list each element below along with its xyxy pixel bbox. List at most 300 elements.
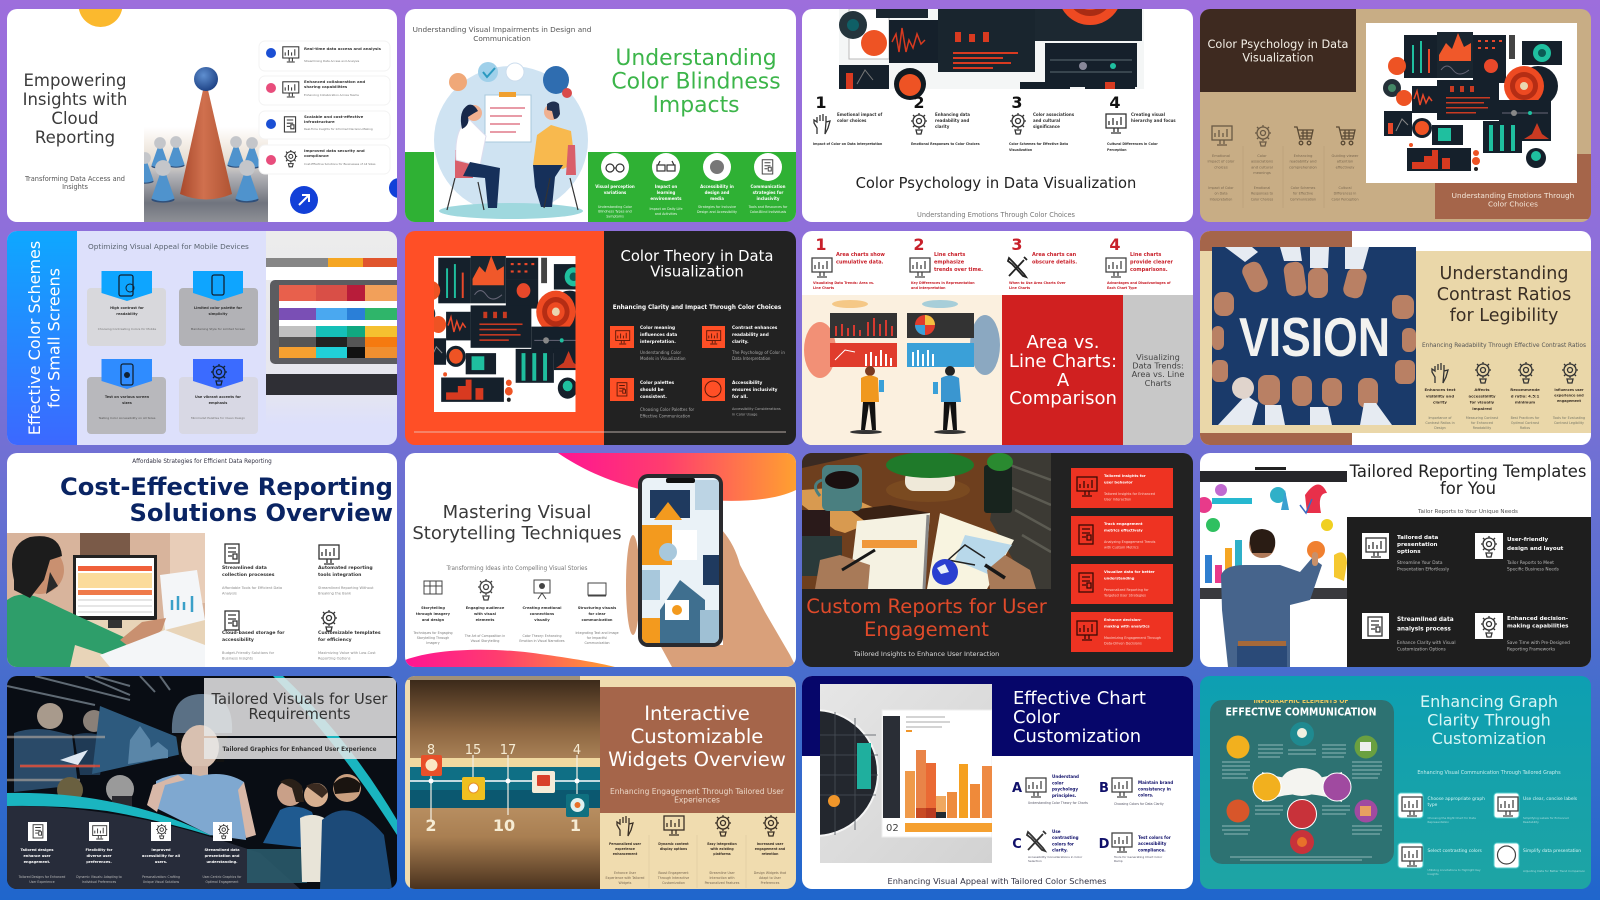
box 1: Tailored Insights for Enhanced bbox=[1103, 492, 1155, 496]
column 3: for Effective bbox=[1293, 192, 1313, 196]
item 2 bbox=[911, 93, 980, 146]
panel: Tailored Reporting Templates bbox=[1196, 453, 1591, 667]
column 1: Contrast Ratios in bbox=[1425, 421, 1455, 425]
subtitle: Tailored Insights to Enhance User Interaction bbox=[853, 650, 999, 658]
item: templates: Customizable templates bbox=[318, 630, 381, 636]
item: decision-making: Save Time with Pre-Designed bbox=[1507, 640, 1570, 646]
title: Cost-Effective Reporting bbox=[60, 473, 393, 501]
item: automated bbox=[318, 545, 374, 596]
subtitle: Enhancing Visual Communication Through Tailored Graphs bbox=[1417, 770, 1561, 776]
column 1: on Data bbox=[1214, 192, 1228, 196]
subtitle: Understanding Emotions Through Color Choices bbox=[917, 211, 1076, 219]
item 2: emphasize bbox=[934, 259, 965, 265]
item 4: User-Centric Graphics for bbox=[203, 875, 242, 879]
item 3: 3 bbox=[1011, 93, 1023, 112]
title: Color bbox=[1013, 707, 1060, 728]
teal swoosh left bbox=[7, 793, 212, 836]
title block: A bbox=[1057, 370, 1070, 391]
box 2: Analyzing Engagement Trends bbox=[1104, 540, 1156, 544]
item 2: 2 bbox=[913, 235, 925, 254]
item 2: Flexibility for bbox=[85, 848, 113, 852]
item 4 bbox=[1106, 235, 1173, 290]
title block: Visualization bbox=[1242, 51, 1314, 64]
list card 3: Real-Time Insights for Informed Decision-Making bbox=[304, 127, 373, 131]
title panel: Tailored Visuals for User bbox=[211, 691, 388, 708]
title: Color Theory in Data bbox=[621, 248, 773, 265]
item D bbox=[1099, 833, 1171, 863]
item D: Test colors for bbox=[1138, 835, 1171, 840]
item: graph type: Representation bbox=[1428, 820, 1449, 824]
item: automated: Automated reporting bbox=[318, 565, 373, 571]
icon: yellow semicircle bbox=[78, 9, 122, 27]
item C: C bbox=[1012, 837, 1022, 852]
card: high contrast: High contrast for bbox=[110, 306, 144, 310]
title block bbox=[1002, 295, 1123, 445]
timeline photo bbox=[410, 680, 600, 889]
column 3: Ratios bbox=[1520, 426, 1530, 430]
item: communication: strategies for bbox=[753, 190, 783, 195]
item B: consistency in bbox=[1138, 786, 1171, 791]
item: graph type: Choose appropriate graph bbox=[1428, 796, 1485, 802]
card: test screen sizes bbox=[87, 359, 166, 434]
column 2: associations bbox=[1251, 160, 1273, 164]
item 1: Area charts show bbox=[836, 252, 885, 258]
dark lower area bbox=[7, 806, 300, 889]
item: graph type: Choosing the Right Chart for Data bbox=[1428, 816, 1476, 820]
title: Understanding bbox=[615, 46, 777, 71]
subtitle: Understanding Visual Impairments in Design and bbox=[413, 25, 591, 34]
item A bbox=[1012, 774, 1088, 805]
panel: Custom Reports for User Engagement bbox=[802, 452, 1193, 667]
item: simplify: Simplify data presentation bbox=[1523, 848, 1581, 854]
item 3: Color Schemes for Effective Data bbox=[1009, 142, 1068, 146]
item: templates: for efficiency bbox=[318, 637, 352, 643]
item: visual perception: variations bbox=[604, 190, 627, 195]
column 1: experience bbox=[615, 847, 635, 851]
item 4: hierarchy and focus bbox=[1131, 118, 1176, 123]
title block bbox=[600, 687, 795, 813]
photo: color palette screen bbox=[266, 231, 402, 425]
item 3: Unique Visual Solutions bbox=[143, 880, 180, 884]
icon: arrow button bbox=[290, 186, 318, 214]
item: palettes: Effective Communication bbox=[640, 414, 691, 418]
item 1: Tailored designs bbox=[20, 848, 54, 852]
item 3 bbox=[1009, 93, 1075, 152]
item: color meaning bbox=[610, 325, 686, 361]
item: learning environments: learning bbox=[657, 190, 675, 195]
item D: compliance. bbox=[1138, 847, 1166, 852]
list card 2: Enhancing Collaboration Across Teams bbox=[304, 93, 359, 97]
column 2: Responses to bbox=[1251, 192, 1273, 196]
column 1: Interpretation bbox=[1210, 197, 1232, 201]
item: contrasting colors: Insights bbox=[1428, 872, 1439, 876]
title: Enhancing Graph bbox=[1420, 692, 1558, 711]
item 3: Improved bbox=[151, 848, 171, 852]
column 3: Recommende bbox=[1510, 387, 1540, 392]
item: communication bbox=[748, 153, 788, 214]
item: learning environments: and Activities bbox=[655, 212, 677, 216]
dashboard image bbox=[1366, 23, 1577, 183]
column 2: Through Interactive bbox=[657, 876, 689, 880]
list card 3: infrastructure bbox=[304, 119, 335, 124]
column 4: Contrast Legibility bbox=[1554, 421, 1584, 425]
item C: Accessibility Considerations in Color bbox=[1028, 855, 1083, 859]
item: simplify bbox=[1494, 843, 1585, 873]
item: visual perception: Understanding Color bbox=[598, 205, 633, 209]
item 4: Cultural Differences in Color bbox=[1107, 142, 1158, 146]
subtitle block bbox=[1435, 154, 1591, 219]
card: vibrant accents: Use vibrant accents for bbox=[195, 395, 241, 399]
subtitle: Affordable Strategies for Efficient Data Reporting bbox=[132, 459, 272, 465]
box 1 bbox=[1071, 468, 1173, 508]
infographic: effective communication: INFOGRAPHIC ELEMENTS OF bbox=[1254, 697, 1349, 705]
item: automated: Streamlined Reporting Without bbox=[318, 586, 374, 590]
item 2: Dynamic Visuals: Adapting to bbox=[76, 875, 122, 879]
item: automated: tools integration bbox=[318, 572, 361, 578]
box 1: User Interaction bbox=[1104, 498, 1131, 502]
item B: Maintain brand bbox=[1138, 780, 1173, 785]
list card 2 bbox=[259, 76, 390, 105]
item: palettes: Color palettes bbox=[640, 380, 675, 386]
list card 1 bbox=[259, 41, 390, 71]
item: automated: Breaking the Bank bbox=[318, 592, 352, 596]
item: emotional: Creating emotional bbox=[523, 606, 561, 610]
column 1 bbox=[606, 816, 644, 885]
item: engaging: Visual Storytelling bbox=[471, 639, 499, 643]
item: presentation bbox=[1362, 533, 1450, 573]
timeline photo: 8 bbox=[427, 743, 435, 758]
gradient swoosh top bbox=[558, 453, 796, 501]
title: Effective Chart bbox=[1013, 688, 1146, 709]
column 3: Communication bbox=[1290, 197, 1316, 201]
column 4: Influences user bbox=[1554, 388, 1584, 392]
item: emotional bbox=[519, 580, 565, 643]
item: graph type: type bbox=[1428, 802, 1438, 808]
item 3: 3 bbox=[1011, 235, 1023, 254]
column 2 bbox=[1466, 362, 1499, 430]
green band bbox=[405, 152, 796, 222]
box 4: making with analytics bbox=[1104, 624, 1150, 628]
panel: Enhancing Graph Clarity bbox=[1200, 676, 1591, 889]
item: accessibility: Accessibility bbox=[732, 380, 762, 386]
title panel bbox=[204, 678, 396, 736]
dashboard image bbox=[418, 255, 593, 412]
column 2: display options bbox=[660, 847, 687, 851]
subtitle block: Area vs. Line bbox=[1132, 369, 1184, 379]
column 3: Optimal Contrast bbox=[1511, 421, 1540, 425]
title block: Interactive bbox=[644, 702, 750, 725]
title block: Comparison bbox=[1009, 388, 1117, 409]
card: vibrant accents bbox=[179, 359, 258, 434]
photo: team and holographic panel bbox=[7, 676, 256, 840]
item 4 bbox=[1106, 93, 1176, 152]
column 4: engagement bbox=[1557, 399, 1581, 403]
item: user-friendly bbox=[1475, 533, 1564, 573]
box 2: Track engagement bbox=[1104, 522, 1143, 526]
item 3: and cultural bbox=[1033, 118, 1061, 123]
column 4 bbox=[754, 815, 787, 885]
title: Mastering Visual bbox=[443, 502, 591, 523]
item: cloud: Cloud-based storage for bbox=[222, 630, 285, 636]
item: palettes: consistent. bbox=[640, 394, 667, 400]
item: communication: Tools and Resources for bbox=[748, 205, 788, 209]
item B bbox=[1099, 778, 1173, 806]
column 1: Enhances text bbox=[1424, 387, 1456, 392]
column 4: Guiding viewer bbox=[1331, 154, 1359, 158]
item: cloud: Budget-Friendly Solutions for bbox=[222, 651, 275, 655]
column 4: Cultural bbox=[1339, 186, 1352, 190]
item 1 bbox=[813, 93, 883, 146]
item: structuring: for clear bbox=[588, 612, 606, 616]
item 3: Line Charts bbox=[1009, 286, 1030, 290]
column 3 bbox=[1289, 127, 1317, 201]
item: analysis bbox=[1362, 613, 1456, 653]
column 4: attention bbox=[1337, 160, 1353, 164]
subtitle: Transforming Data Access and bbox=[24, 175, 125, 183]
item D: accessibility bbox=[1138, 841, 1167, 846]
title: Impacts bbox=[652, 93, 740, 118]
item: learning environments: Impact on Daily Life bbox=[650, 207, 682, 211]
item: analysis: analysis process bbox=[1397, 626, 1451, 632]
item A: psychology bbox=[1052, 787, 1078, 792]
card: high contrast bbox=[87, 271, 166, 346]
column 2: Affects bbox=[1474, 387, 1490, 392]
column 3: Personalized Features bbox=[705, 881, 740, 885]
item: cloud: accessibility bbox=[222, 637, 254, 643]
item: contrasting colors: Select contrasting colors bbox=[1428, 848, 1483, 854]
card: high contrast: Choosing Contrasting Colors for Mobile bbox=[98, 327, 156, 331]
item: visual perception: Symptoms bbox=[606, 214, 624, 218]
column 1 bbox=[1208, 126, 1235, 201]
item 3: Personalization: Crafting bbox=[142, 875, 180, 879]
box 2: metrics effectively bbox=[1104, 528, 1143, 532]
item: visual perception: Visual perception bbox=[595, 184, 635, 189]
item D: Tools for Generating Chart Color bbox=[1113, 855, 1163, 859]
item: accessibility: for all. bbox=[732, 394, 748, 400]
title: Clarity Through bbox=[1427, 710, 1551, 730]
column 2: Readability bbox=[1473, 426, 1491, 430]
item 4: Advantages and Disadvantages of bbox=[1107, 281, 1171, 285]
card: limited palette bbox=[179, 271, 258, 346]
card: test screen sizes: Test on various screen bbox=[105, 395, 150, 399]
column 3: readability and bbox=[1289, 160, 1317, 164]
subtitle: Communication bbox=[473, 34, 531, 43]
item: contrast bbox=[702, 325, 785, 361]
item: graph type bbox=[1398, 793, 1485, 824]
item: user-friendly: design and layout bbox=[1507, 546, 1564, 552]
card: limited palette: simplicity bbox=[208, 312, 228, 316]
item A: principles. bbox=[1052, 793, 1077, 798]
item: learning environments: environments bbox=[650, 196, 682, 201]
item 1: Impact of Color on Data Interpretation bbox=[813, 142, 883, 146]
illustration: two people at clipboard bbox=[434, 62, 588, 219]
item: structuring: Communication bbox=[584, 641, 610, 645]
item 1: enhance user bbox=[23, 854, 51, 858]
item: presentation: Streamline Your Data bbox=[1397, 560, 1443, 566]
timeline photo: 1 bbox=[570, 816, 581, 835]
panel: Effective Color Schemes for Small Screens bbox=[7, 231, 402, 445]
panel: Understanding Color Blindness Impacts bbox=[405, 9, 796, 222]
item: labels bbox=[1494, 793, 1578, 824]
dashboard image bbox=[839, 0, 1144, 100]
item: emotional: connections bbox=[530, 612, 554, 616]
list card 4: compliance bbox=[304, 153, 329, 158]
title: Engagement bbox=[864, 618, 989, 641]
subtitle panel bbox=[204, 738, 396, 759]
item 4: presentation and bbox=[205, 854, 240, 858]
item: analysis: Customization Options bbox=[1397, 647, 1446, 653]
illustration: analysts and charts bbox=[802, 295, 1002, 445]
item A: A bbox=[1012, 781, 1022, 796]
teal swoosh right bbox=[273, 676, 397, 835]
item 1: color choices bbox=[837, 118, 867, 123]
item: emotional: visually bbox=[534, 618, 550, 622]
item B: B bbox=[1099, 781, 1109, 796]
column 4: Differences in bbox=[1334, 192, 1356, 196]
column 4 bbox=[1552, 362, 1585, 425]
item 2: and Interpretation bbox=[911, 286, 946, 290]
item: engaging: Engaging audience bbox=[466, 606, 505, 610]
item 2: 2 bbox=[913, 93, 925, 112]
list card 3 bbox=[259, 111, 390, 139]
item A: Understand bbox=[1052, 774, 1079, 779]
title block: Widgets Overview bbox=[608, 748, 786, 771]
item 2: Line charts bbox=[934, 252, 965, 258]
item 2 bbox=[76, 822, 122, 884]
item 4: Line charts bbox=[1130, 252, 1161, 258]
column 3: platforms bbox=[713, 852, 731, 856]
column 4: Preferences bbox=[761, 881, 780, 885]
column 2: accessibility bbox=[1468, 393, 1496, 398]
item 1: Emotional impact of bbox=[837, 112, 883, 117]
timeline photo: 4 bbox=[573, 743, 581, 758]
column 4: effectively bbox=[1336, 165, 1355, 169]
item 3: Area charts can bbox=[1032, 252, 1077, 258]
item: emotional: Color Theory: Enhancing bbox=[523, 634, 561, 638]
item: structuring: communication bbox=[582, 618, 613, 622]
photo: analyst at monitor bbox=[7, 533, 205, 667]
item: accessibility bbox=[702, 378, 781, 416]
timeline photo: 15 bbox=[465, 743, 481, 758]
vertical title band: Effective Color Schemes bbox=[25, 241, 44, 435]
infographic: effective communication: EFFECTIVE COMMUNICATION bbox=[1226, 706, 1376, 718]
panel: Effective Chart Color Customization bbox=[752, 676, 1193, 889]
item: user-friendly: User-friendly bbox=[1507, 537, 1549, 543]
item 3: Color associations bbox=[1033, 112, 1075, 117]
item B: colors. bbox=[1138, 793, 1154, 798]
item: imagery: Imagery bbox=[426, 641, 440, 645]
box 4: Maximizing Engagement Through bbox=[1104, 636, 1161, 640]
title block bbox=[1200, 9, 1356, 92]
item: accessibility: Strategies for Inclusive bbox=[698, 205, 736, 209]
title: Insights with bbox=[23, 90, 127, 109]
column 1: clarity bbox=[1433, 400, 1447, 405]
card: high contrast: readability bbox=[116, 312, 138, 316]
item: decision-making: Enhanced decision- bbox=[1507, 616, 1569, 622]
item: palettes: Choosing Color Palettes for bbox=[640, 407, 695, 412]
panel: Empowering Insights with Cloud Reporting bbox=[7, 0, 409, 222]
column 2: Dynamic content bbox=[658, 842, 689, 846]
photo: desk with notebook bbox=[802, 452, 1051, 589]
column 1: Impact of Color bbox=[1208, 186, 1234, 190]
title block: Color Psychology in Data bbox=[1208, 38, 1348, 51]
item 4: 4 bbox=[1109, 93, 1121, 112]
item: structuring: Integrating Text and Image bbox=[575, 631, 619, 635]
item: learning environments: Impact on bbox=[655, 184, 677, 189]
column 1: impact of color bbox=[1208, 160, 1235, 164]
item B: Choosing Colors for Data Clarity bbox=[1114, 802, 1164, 806]
item: accessibility: Accessibility in bbox=[700, 184, 734, 189]
item 2: preferences. bbox=[86, 860, 112, 864]
column 4: Tools for Evaluating bbox=[1552, 416, 1585, 420]
item 2: trends over time. bbox=[934, 267, 983, 273]
item 4: Perception bbox=[1107, 148, 1127, 152]
photo: VISION with hands bbox=[1212, 247, 1416, 425]
panel: Color Psychology (white) bbox=[802, 0, 1193, 222]
timeline photo: 10 bbox=[493, 816, 515, 835]
item: accessibility: Accessibility Considerations bbox=[732, 407, 781, 411]
item: analysis: Streamlined data bbox=[1397, 617, 1454, 623]
item C: Selection bbox=[1028, 859, 1042, 863]
column 3: Easy integration bbox=[707, 842, 737, 846]
panel: Interactive Customizable Widgets bbox=[405, 676, 796, 889]
column 2: Customization bbox=[662, 881, 685, 885]
item: emotional: Emotion in Visual Narratives bbox=[519, 639, 565, 643]
item: engaging: The Art of Composition in bbox=[464, 634, 505, 638]
item: contrast: clarity. bbox=[732, 339, 749, 345]
subtitle: Enhancing Readability Through Effective Contrast Ratios bbox=[1422, 343, 1586, 349]
item: templates: Reporting Options bbox=[318, 657, 351, 661]
item: labels: Readability bbox=[1523, 820, 1539, 824]
item: color meaning: influences data bbox=[640, 332, 677, 338]
item 1 bbox=[18, 822, 65, 884]
item 1: Visualizing Data Trends: Area vs. bbox=[813, 281, 874, 285]
chart image: 02 bbox=[886, 823, 899, 834]
card: limited palette: Maintaining Style for Limited Screen bbox=[191, 327, 245, 331]
column 4: Increased user bbox=[757, 842, 784, 846]
item: streamlined bbox=[222, 544, 282, 596]
list card 4 bbox=[259, 145, 390, 174]
item: templates: Maximizing Value with Low-Cost bbox=[318, 651, 376, 655]
item 1: Line Charts bbox=[813, 286, 834, 290]
subtitle block: Visualizing bbox=[1136, 352, 1180, 362]
item C: Use bbox=[1052, 829, 1061, 834]
item: imagery: and design bbox=[422, 618, 445, 622]
card: limited palette: Limited color palette for bbox=[194, 306, 242, 310]
item: palettes: should be bbox=[640, 387, 664, 393]
title: Solutions Overview bbox=[129, 499, 393, 527]
item 4: comparisons. bbox=[1130, 267, 1168, 273]
item 4: Each Chart Type bbox=[1107, 286, 1138, 290]
item: imagery: through imagery bbox=[416, 612, 451, 616]
title: for You bbox=[1440, 479, 1496, 498]
item C bbox=[1012, 829, 1083, 863]
list card 3: Scalable and cost-effective bbox=[304, 114, 364, 119]
photo: man at whiteboard bbox=[1196, 467, 1347, 667]
column 1 bbox=[1424, 363, 1456, 430]
item 3 bbox=[142, 822, 180, 884]
hand holding phone bbox=[626, 474, 796, 667]
item 4: understanding. bbox=[206, 860, 238, 864]
subtitle block: Data Trends: bbox=[1132, 361, 1184, 371]
box 2 bbox=[1071, 516, 1173, 556]
title: Contrast Ratios bbox=[1437, 285, 1571, 305]
box 3: Visualize data for better bbox=[1104, 570, 1155, 574]
item 2: Emotional Responses to Color Choices bbox=[911, 142, 980, 146]
item: accessibility: design and bbox=[705, 190, 730, 195]
column 1: visibility and bbox=[1426, 393, 1454, 398]
column 2: Measuring Contrast bbox=[1466, 416, 1499, 420]
